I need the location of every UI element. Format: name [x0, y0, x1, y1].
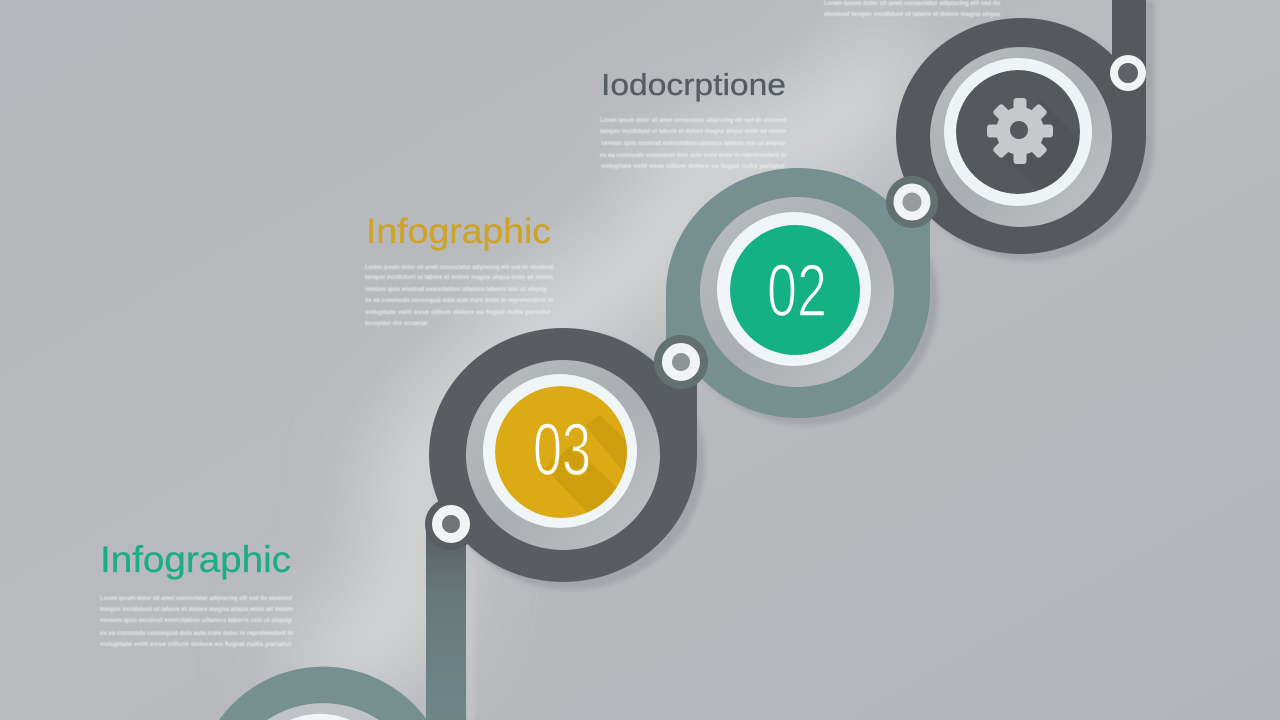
connector node: bottom	[425, 498, 477, 550]
connector bar to bottom step	[426, 524, 466, 720]
white ring 02	[717, 212, 871, 366]
text block: yellow: ex ea commodo consequat duis aute irure dolor in reprehenderit in	[365, 297, 553, 304]
drop shadows of the ribbon	[437, 0, 1154, 590]
step 03: yellow ring	[429, 328, 697, 582]
text block: yellow: excepteur sint occaecat	[365, 320, 428, 327]
white ring gear	[944, 58, 1092, 206]
text block: green	[100, 595, 293, 648]
bottom teal step ring	[219, 667, 427, 720]
text block: yellow: Lorem ipsum dolor sit amet consectetur adipiscing elit sed do eiusmod	[365, 264, 553, 271]
text block: yellow: tempor incididunt ut labore et dolore magna aliqua enim ad minim	[365, 274, 553, 281]
heading: green: Infographic	[100, 539, 291, 580]
green disc 02	[730, 225, 860, 355]
text block: upper: voluptate velit esse cillum dolore eu fugiat nulla pariatur	[601, 163, 785, 170]
step 02: teal ring	[666, 168, 930, 418]
text block: yellow: veniam quis nostrud exercitation ullamco laboris nisi ut aliquip	[365, 286, 547, 293]
top text block: Lorem ipsum dolor sit amet consectetur adipiscing elit sed do	[824, 0, 1000, 7]
text block: upper: Lorem ipsum dolor sit amet consectetur adipiscing elit sed do eiusmod	[600, 117, 786, 124]
text block: green: Lorem ipsum dolor sit amet consectetur adipiscing elit sed do eiusmod	[100, 595, 292, 602]
text block: yellow	[365, 264, 553, 327]
connector node: 02 to gear	[886, 176, 938, 228]
number 02: 02	[767, 249, 827, 332]
text block: yellow: voluptate velit esse cillum dolore eu fugiat nulla pariatur	[365, 309, 551, 316]
text block: green: ex ea commodo consequat duis aute irure dolor in reprehenderit in	[100, 630, 293, 637]
light strip beside bottom bar	[466, 565, 475, 720]
text block: upper: veniam quis nostrud exercitation ullamco laboris nisi ut aliquip	[601, 140, 785, 147]
text block: upper: tempor incididunt ut labore et dolore magna aliqua enim ad minim	[600, 128, 786, 135]
top text block: eiusmod tempor incididunt ut labore et dolore magna aliqua	[824, 11, 1000, 18]
text block: green: veniam quis nostrud exercitation ullamco laboris nisi ut aliquip	[100, 617, 292, 624]
dark disc gear	[956, 70, 1090, 195]
heading: yellow: Infographic	[366, 212, 551, 251]
text block: upper	[600, 117, 786, 170]
connector node: 03 to 02	[654, 335, 708, 389]
yellow disc 03	[495, 386, 627, 518]
text block: green: voluptate velit esse cillum dolore eu fugiat nulla pariatur	[100, 641, 293, 648]
connector node: top	[1114, 59, 1142, 87]
top text block	[824, 0, 1000, 18]
white ring 03	[483, 374, 637, 528]
number 03: 03	[533, 408, 591, 491]
text block: upper: ex ea commodo consequat duis aute irure dolor in reprehenderit in	[600, 152, 786, 159]
text block: green: tempor incididunt ut labore et dolore magna aliqua enim ad minim	[100, 606, 293, 613]
icon: gear	[987, 98, 1053, 164]
step 01: gear ring	[896, 0, 1146, 254]
heading: upper: Iodocrptione	[601, 67, 786, 102]
